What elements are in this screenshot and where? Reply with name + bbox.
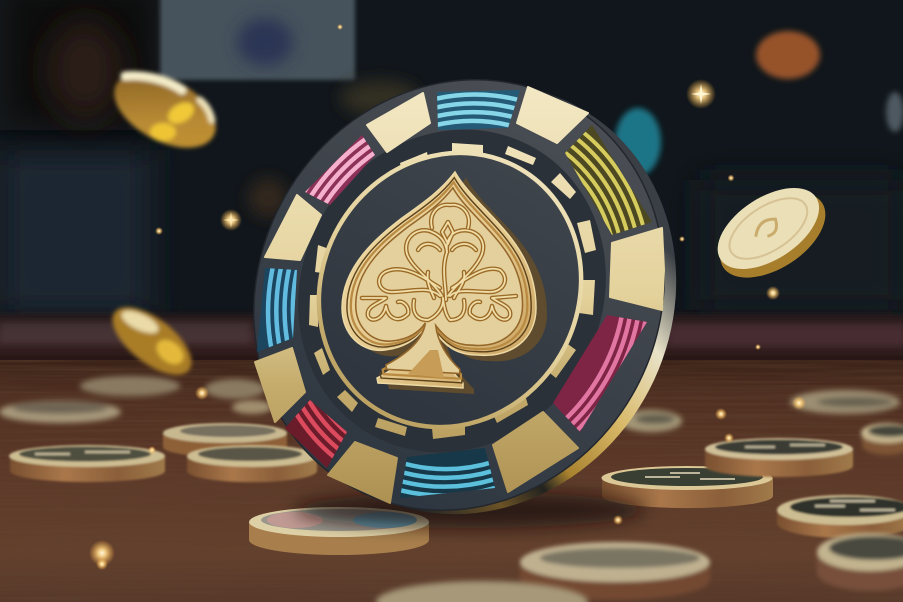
coin: behind chip lower: [232, 400, 272, 414]
chip rim: [188, 8, 754, 590]
sparkle: left: [220, 209, 242, 231]
pink stripes: upper left: [305, 135, 375, 205]
poker chip: [253, 79, 676, 514]
red stripes: [285, 400, 347, 468]
coin: bottom centre: [376, 581, 588, 602]
spade shadow: [353, 178, 547, 394]
coin: far centre-left: [80, 376, 180, 396]
coin: right: [705, 438, 853, 477]
chip shadow: [295, 492, 645, 528]
blue stripes: top: [437, 90, 520, 130]
pink stripes: right: [553, 315, 647, 432]
background coins on table: [0, 376, 903, 602]
wooden table surface: [0, 360, 903, 602]
gold edge segments: [255, 87, 664, 503]
table rail: [0, 314, 903, 364]
yellow stripes: [565, 125, 652, 235]
coin: bottom right: [817, 533, 903, 591]
coin: centre left back: [163, 423, 287, 457]
coin: front colored: [249, 507, 429, 555]
coin: right edge: [861, 423, 903, 455]
coin: centre right: [602, 466, 773, 508]
blue stripes: left: [257, 268, 297, 352]
chip face: [176, 4, 742, 586]
coin: far left: [0, 401, 121, 423]
flying coin: lower left: [101, 295, 203, 387]
coin: lower right: [777, 495, 903, 538]
spade emblem: [342, 172, 536, 388]
coin: front centre: [520, 542, 710, 600]
blue stripes: bottom: [400, 448, 495, 498]
inner disc with gold ring: [269, 105, 631, 475]
coin: right of chip: [620, 410, 682, 432]
small glowing dots: [148, 24, 806, 525]
flying coin: right: [702, 170, 840, 295]
coin: near chip: [187, 445, 317, 482]
sparkle: bottom left glow: [89, 540, 115, 570]
coin: left front: [9, 445, 165, 482]
ring tabs: [309, 143, 596, 439]
flying coin: top left: [102, 57, 228, 163]
inner shaded band: [240, 73, 664, 509]
sparkle: top right: [686, 79, 716, 109]
coin: behind chip upper: [205, 379, 265, 399]
coin: far right: [790, 390, 900, 414]
